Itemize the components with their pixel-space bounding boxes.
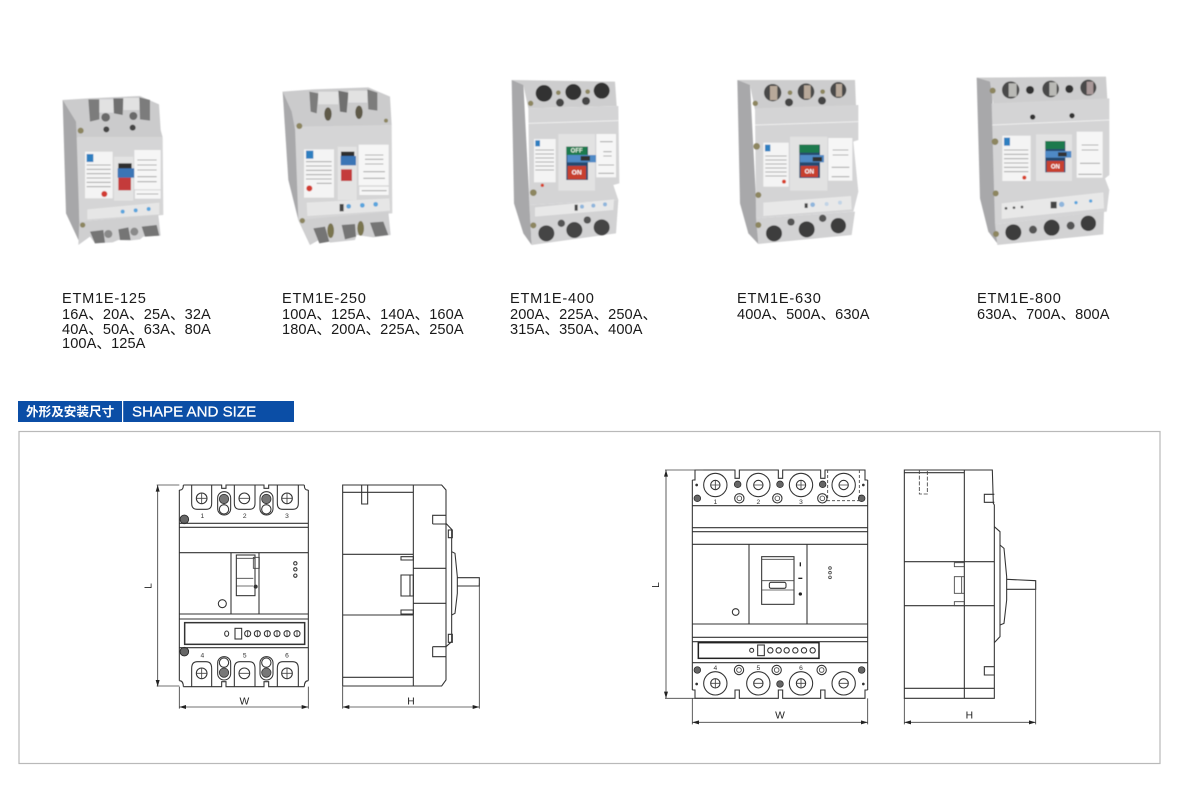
- front view outline: 6: [799, 665, 803, 672]
- dimension lines L W H: [144, 485, 479, 709]
- model text: ETM1E-250: 180A、200A、225A、250A: [282, 322, 464, 338]
- model text: ETM1E-400: ETM1E-400: [510, 291, 595, 307]
- section heading bar: [18, 401, 294, 422]
- model text: ETM1E-800: ETM1E-800: [977, 291, 1062, 307]
- model text: ETM1E-125: ETM1E-125: [62, 291, 147, 307]
- front view outline: 2: [243, 513, 247, 520]
- model text: ETM1E-800: [977, 291, 1110, 323]
- front view outline: 4: [713, 665, 717, 672]
- dimension lines L W H: L: [651, 582, 662, 588]
- front view outline: [179, 485, 308, 687]
- model text: ETM1E-250: ETM1E-250: [282, 291, 367, 307]
- front view outline: 3: [285, 513, 289, 520]
- dimension lines L W H: W: [775, 711, 785, 722]
- product photo: ETM1E-800 breaker: [977, 77, 1109, 245]
- drawing: larger frame breaker front, side and dimensions: [651, 470, 1036, 724]
- side view outline: [904, 470, 1036, 698]
- panel: dimension drawings frame: [19, 432, 1160, 764]
- drawing: smaller frame breaker front, side and dimensions: [144, 485, 479, 709]
- dimension lines L W H: L: [144, 583, 155, 589]
- model text: ETM1E-630: ETM1E-630: [737, 291, 822, 307]
- model text: ETM1E-250: [282, 291, 464, 338]
- front view outline: [692, 470, 868, 698]
- side view outline: [343, 485, 479, 686]
- model text: ETM1E-400: [510, 291, 657, 338]
- front view outline: 5: [243, 652, 247, 659]
- product photo: ETM1E-400 breaker: OFF: [571, 148, 583, 154]
- product photo: ETM1E-400 breaker: [512, 80, 619, 245]
- section heading bar: SHAPE AND SIZE: [132, 404, 256, 420]
- dimension lines L W H: H: [407, 696, 415, 707]
- product photo: ETM1E-400 breaker: ON: [572, 170, 582, 177]
- section heading bar: 外形及安装尺寸: [26, 404, 115, 419]
- front view outline: 1: [713, 499, 717, 506]
- model text: ETM1E-250: 100A、125A、140A、160A: [282, 307, 464, 323]
- model text: ETM1E-400: 200A、225A、250A、: [510, 307, 657, 323]
- model text: ETM1E-630: [737, 291, 870, 323]
- dimension lines L W H: W: [239, 696, 249, 707]
- product photo: ETM1E-250 breaker: [283, 87, 392, 245]
- product photo: ETM1E-630 breaker: [737, 80, 858, 244]
- front view outline: 3: [799, 499, 803, 506]
- front view outline: 5: [756, 665, 760, 672]
- dimension lines L W H: H: [966, 711, 973, 722]
- front view outline: 1: [200, 513, 204, 520]
- dimension lines L W H: [651, 470, 1036, 724]
- model text: ETM1E-400: 315A、350A、400A: [510, 322, 643, 338]
- product photo: ETM1E-630 breaker: ON: [805, 168, 815, 175]
- product photo: ETM1E-800 breaker: ON: [1051, 164, 1060, 170]
- front view outline: 4: [200, 652, 204, 659]
- front view outline: 2: [756, 499, 760, 506]
- model text: ETM1E-800: 630A、700A、800A: [977, 307, 1110, 323]
- model text: ETM1E-125: 40A、50A、63A、80A: [62, 322, 211, 338]
- model text: ETM1E-630: 400A、500A、630A: [737, 307, 870, 323]
- model text: ETM1E-125: [62, 291, 211, 352]
- front view outline: 6: [285, 652, 289, 659]
- model text: ETM1E-125: 16A、20A、25A、32A: [62, 307, 211, 323]
- model text: ETM1E-125: 100A、125A: [62, 336, 146, 352]
- product photo: ETM1E-125 breaker: [63, 96, 163, 245]
